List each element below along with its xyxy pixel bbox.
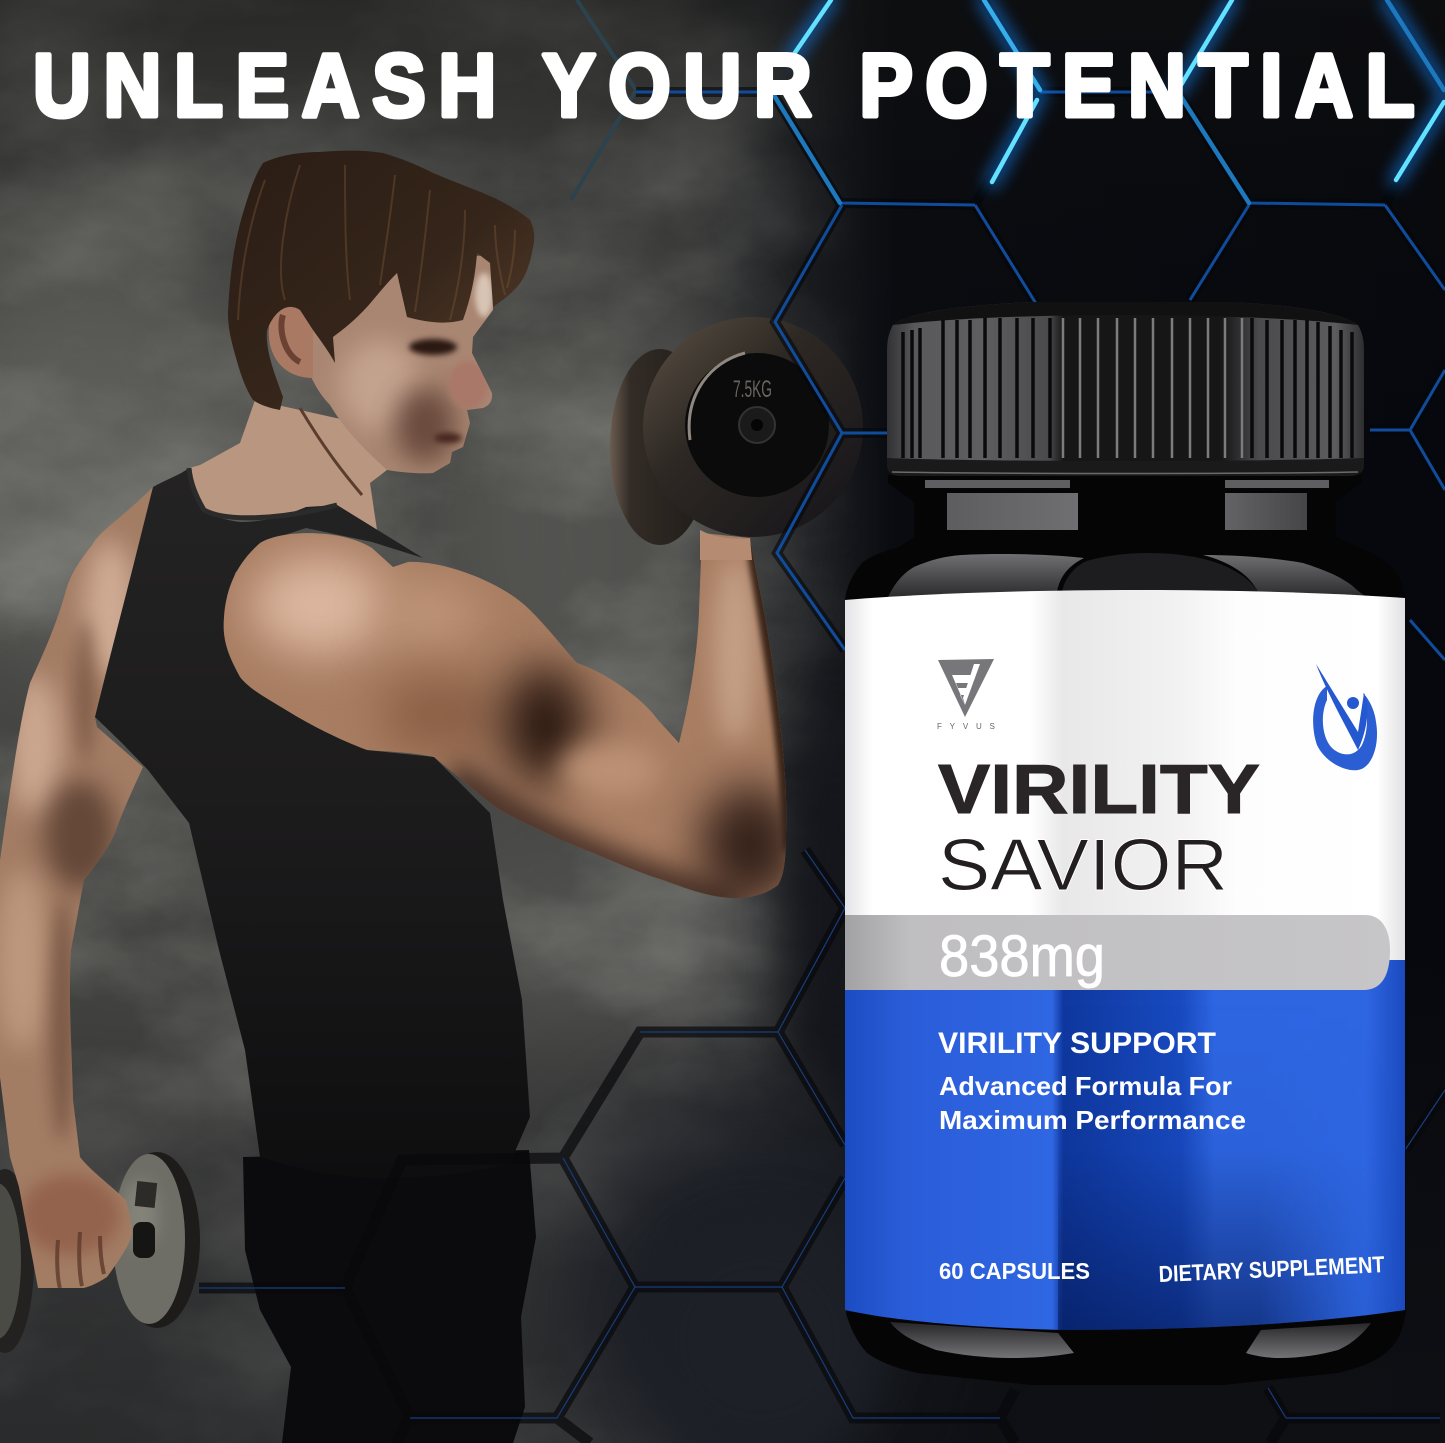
product name: Savior: SAVIOR xyxy=(938,825,1228,906)
logo: blue figure xyxy=(1313,664,1377,770)
neon glow segments xyxy=(772,0,1444,203)
weight marking: 7.5KG xyxy=(733,376,772,403)
title: UNLEASH YOUR POTENTIAL xyxy=(33,35,1415,135)
hair xyxy=(228,151,534,410)
product name: Virility: VIRILITY xyxy=(938,750,1260,828)
dosage: 838mg xyxy=(939,924,1105,989)
head and face xyxy=(228,151,534,480)
curled arm with bicep xyxy=(220,525,800,905)
label copy: VIRILITY SUPPORT xyxy=(938,1027,1216,1060)
upper dumbbell xyxy=(610,317,863,545)
label copy: 60 CAPSULES xyxy=(939,1258,1090,1284)
ear xyxy=(269,300,313,378)
tank top xyxy=(95,468,530,1178)
grey dosage band xyxy=(845,915,1390,990)
logo: Fyvus xyxy=(937,659,1003,731)
white label xyxy=(845,590,1405,965)
man lifting dumbbells xyxy=(0,151,863,1443)
label copy xyxy=(938,1027,1385,1287)
background: smoke to dark xyxy=(0,0,931,1443)
blue label section xyxy=(845,960,1405,1330)
back and lowered arm xyxy=(0,480,160,1300)
face xyxy=(312,256,493,474)
bottle glass body xyxy=(840,470,1410,1390)
label copy: Advanced Formula For xyxy=(939,1071,1232,1101)
label copy: Maximum Performance xyxy=(939,1105,1246,1135)
label copy: DIETARY SUPPLEMENT xyxy=(1158,1251,1385,1287)
neck xyxy=(189,400,387,530)
lower left dumbbell xyxy=(0,1152,200,1353)
shorts xyxy=(243,1150,536,1443)
wrist below upper dumbbell xyxy=(700,530,752,560)
cap xyxy=(887,302,1364,476)
logo: Fyvus: FYVUS xyxy=(937,722,1003,731)
product bottle xyxy=(840,302,1410,1390)
